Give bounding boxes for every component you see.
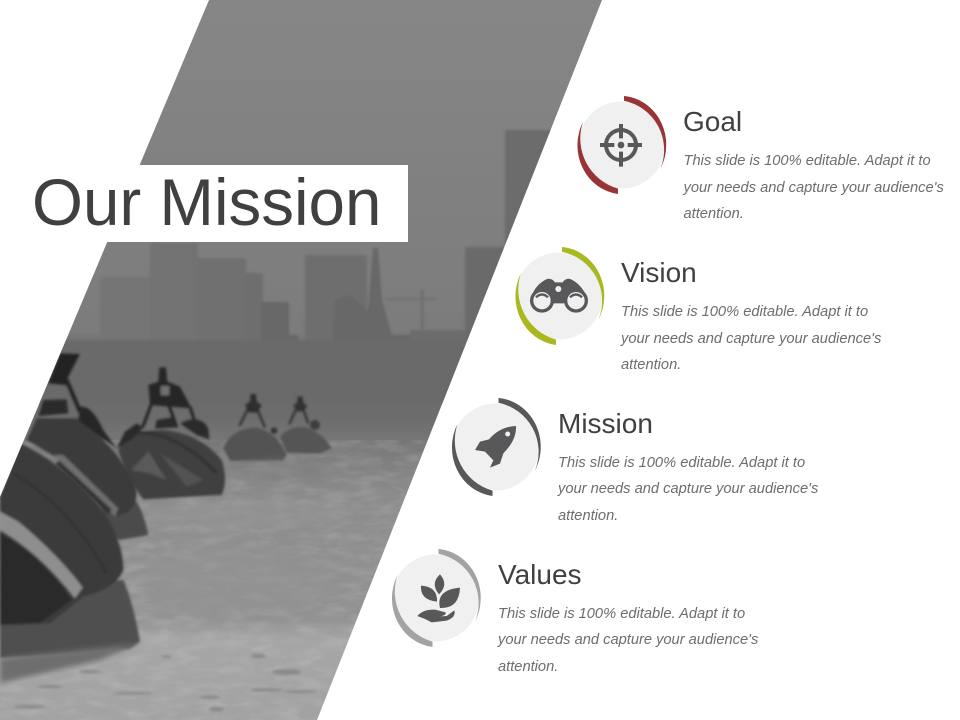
item: Vision bbox=[515, 247, 882, 373]
text: Values description: attention. bbox=[498, 659, 558, 675]
text: Vision description bbox=[620, 304, 882, 373]
title: Our Mission on white box: Our Mission bbox=[32, 166, 381, 239]
icon: vision ring and binoculars bbox=[515, 247, 604, 345]
boats, drawn in zoomed coordinates bbox=[0, 353, 347, 712]
water mist around boats bbox=[254, 468, 293, 480]
text: Mission description bbox=[557, 455, 819, 524]
text: Goal description bbox=[682, 153, 944, 222]
second boat, left bbox=[27, 353, 148, 540]
heading: Mission: Mission bbox=[558, 408, 653, 439]
shore flecks bbox=[13, 654, 317, 712]
item: Goal bbox=[577, 96, 944, 222]
text: Values description bbox=[497, 606, 759, 675]
icon: values ring and plant in hand bbox=[392, 549, 481, 647]
text: Values description: your needs and capture your audience's bbox=[497, 632, 759, 648]
water noise bbox=[332, 442, 333, 443]
icon: goal ring and crosshair bbox=[577, 96, 666, 194]
text: Vision description: This slide is 100% editable. Adapt it to bbox=[621, 304, 868, 320]
hull shadow on water bbox=[0, 643, 140, 683]
middle boat bbox=[117, 367, 225, 499]
skyline buildings bbox=[0, 130, 555, 405]
text: Vision description: your needs and capture your audience's bbox=[620, 331, 882, 347]
heading: Vision: Vision bbox=[621, 257, 697, 288]
text: Goal description: This slide is 100% editable. Adapt it to bbox=[684, 153, 931, 169]
icon: mission ring and rocket bbox=[452, 398, 541, 496]
front boat hull bbox=[0, 443, 140, 658]
heading: Goal: Goal bbox=[683, 106, 742, 137]
far right boats bbox=[223, 394, 332, 461]
photo panel: boats on water with city skyline bbox=[0, 0, 620, 720]
item: Values bbox=[392, 549, 759, 675]
item: Mission bbox=[452, 398, 819, 524]
heading: Values: Values bbox=[498, 559, 582, 590]
text: Goal description: attention. bbox=[684, 206, 744, 222]
text: Mission description: attention. bbox=[558, 508, 618, 524]
text: Vision description: attention. bbox=[621, 357, 681, 373]
text: Goal description: your needs and capture your audience's bbox=[682, 180, 944, 196]
text: Mission description: your needs and capture your audience's bbox=[557, 481, 819, 497]
text: Mission description: This slide is 100% editable. Adapt it to bbox=[558, 455, 805, 471]
text: Values description: This slide is 100% editable. Adapt it to bbox=[498, 606, 745, 622]
